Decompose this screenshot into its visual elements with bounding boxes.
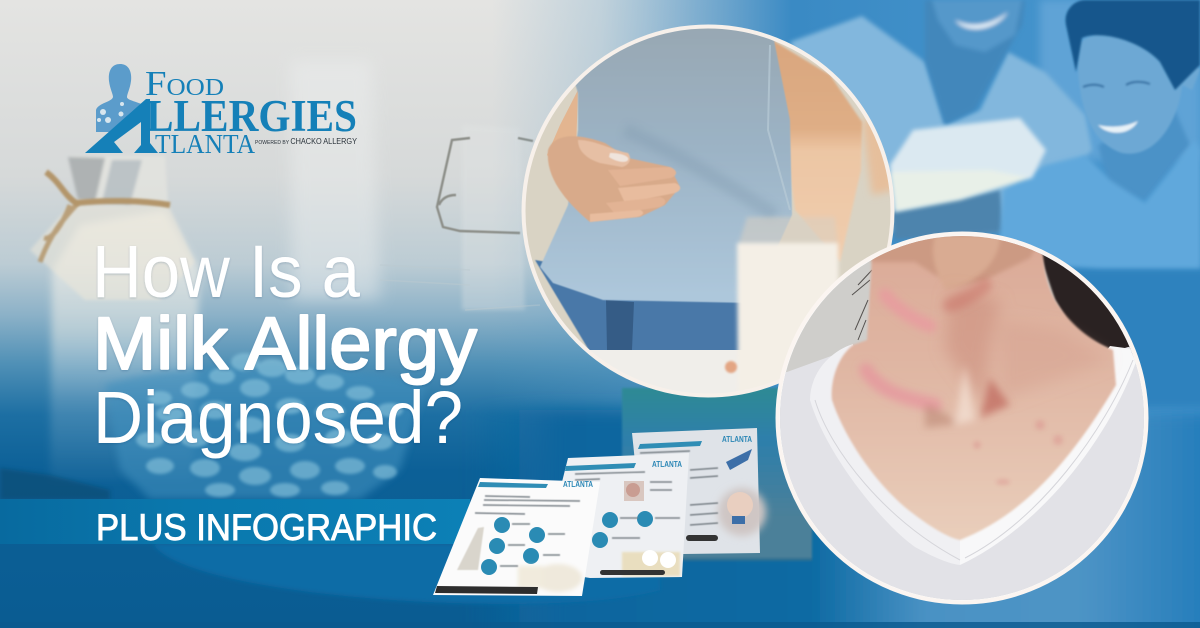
glass of milk being poured (890, 118, 1046, 212)
jeans (535, 260, 745, 356)
title line 2: Milk Allergy (93, 302, 477, 385)
chin shadow (870, 236, 1035, 286)
photo backdrop (526, 41, 890, 348)
tank top (540, 20, 792, 303)
title line 3: Diagnosed? (93, 376, 463, 459)
glass of milk (734, 216, 840, 350)
preview page 3 (back) (632, 428, 766, 554)
preview page 2 (middle) (540, 453, 689, 578)
background block: lower table band (470, 410, 1200, 628)
left arm (547, 90, 578, 156)
hair (852, 253, 1134, 356)
boy neck (1098, 110, 1190, 200)
banner text: PLUS INFOGRAPHIC (96, 507, 437, 548)
table (1000, 268, 1200, 408)
boy face (1078, 29, 1200, 154)
infographic page previews (433, 428, 766, 596)
circular photo: rash on neck and chest (770, 230, 1160, 610)
round icons (481, 517, 545, 575)
background object: glass jar with handle (380, 125, 540, 310)
powered by text: POWERED BY CHACKO ALLERGY (255, 137, 358, 146)
dairy photo strip (518, 564, 582, 592)
wordmark TLANTA: TLANTA (155, 129, 255, 159)
right arm (772, 40, 862, 262)
background object: milk jug (290, 60, 380, 300)
scattered spots (973, 420, 1063, 485)
banner: Plus Infographic (0, 499, 470, 548)
neck and chest skin (832, 240, 1116, 540)
boy hair (1066, 0, 1200, 90)
background object: dark foliage (0, 468, 110, 500)
preview page 1 (front) (433, 478, 600, 596)
far hand behind (862, 118, 890, 197)
title: How Is a Milk Allergy Diagnosed? (92, 230, 477, 459)
background object: milk bottle (30, 156, 200, 480)
logo mark page 2: ATLANTA (652, 460, 682, 469)
mother shirt (790, 16, 1092, 230)
wordmark FOOD: FOOD (145, 64, 224, 103)
backdrop behind boy (1040, 0, 1200, 160)
title line 1: How Is a (92, 230, 361, 313)
icon: person silhouette with dots (96, 64, 148, 132)
logo: Food Allergies Atlanta (85, 64, 358, 159)
circular photo: woman holding stomach with milk (520, 20, 900, 410)
milk bottle illustration (457, 527, 484, 570)
fingertip behind glass (725, 361, 737, 373)
background photo: mother and boy pouring milk (790, 0, 1200, 408)
boy shirt (998, 140, 1200, 268)
cloth cap (30, 156, 195, 300)
background object: bowl of white flakes (105, 353, 425, 499)
logo mark page 1: ATLANTA (563, 480, 593, 489)
background block: teal panel (622, 388, 812, 561)
wordmark LLERGIES: LLERGIES (146, 91, 357, 141)
mother neck and chin (925, 0, 1025, 125)
table (590, 350, 741, 394)
twine (46, 172, 170, 205)
dark area under glass (890, 190, 1005, 240)
wordmark big A stroke (85, 99, 158, 153)
shirt (780, 346, 1144, 600)
neck shading (944, 294, 1086, 396)
logo mark page 3: ATLANTA (722, 435, 752, 444)
hand on stomach (548, 136, 680, 222)
collar band (810, 344, 1140, 565)
rash marks (866, 285, 985, 405)
black footer strip (435, 586, 538, 594)
photo backdrop (780, 236, 1144, 600)
collarbone notch shadow (925, 365, 1010, 428)
background object: blue plate (153, 544, 660, 604)
